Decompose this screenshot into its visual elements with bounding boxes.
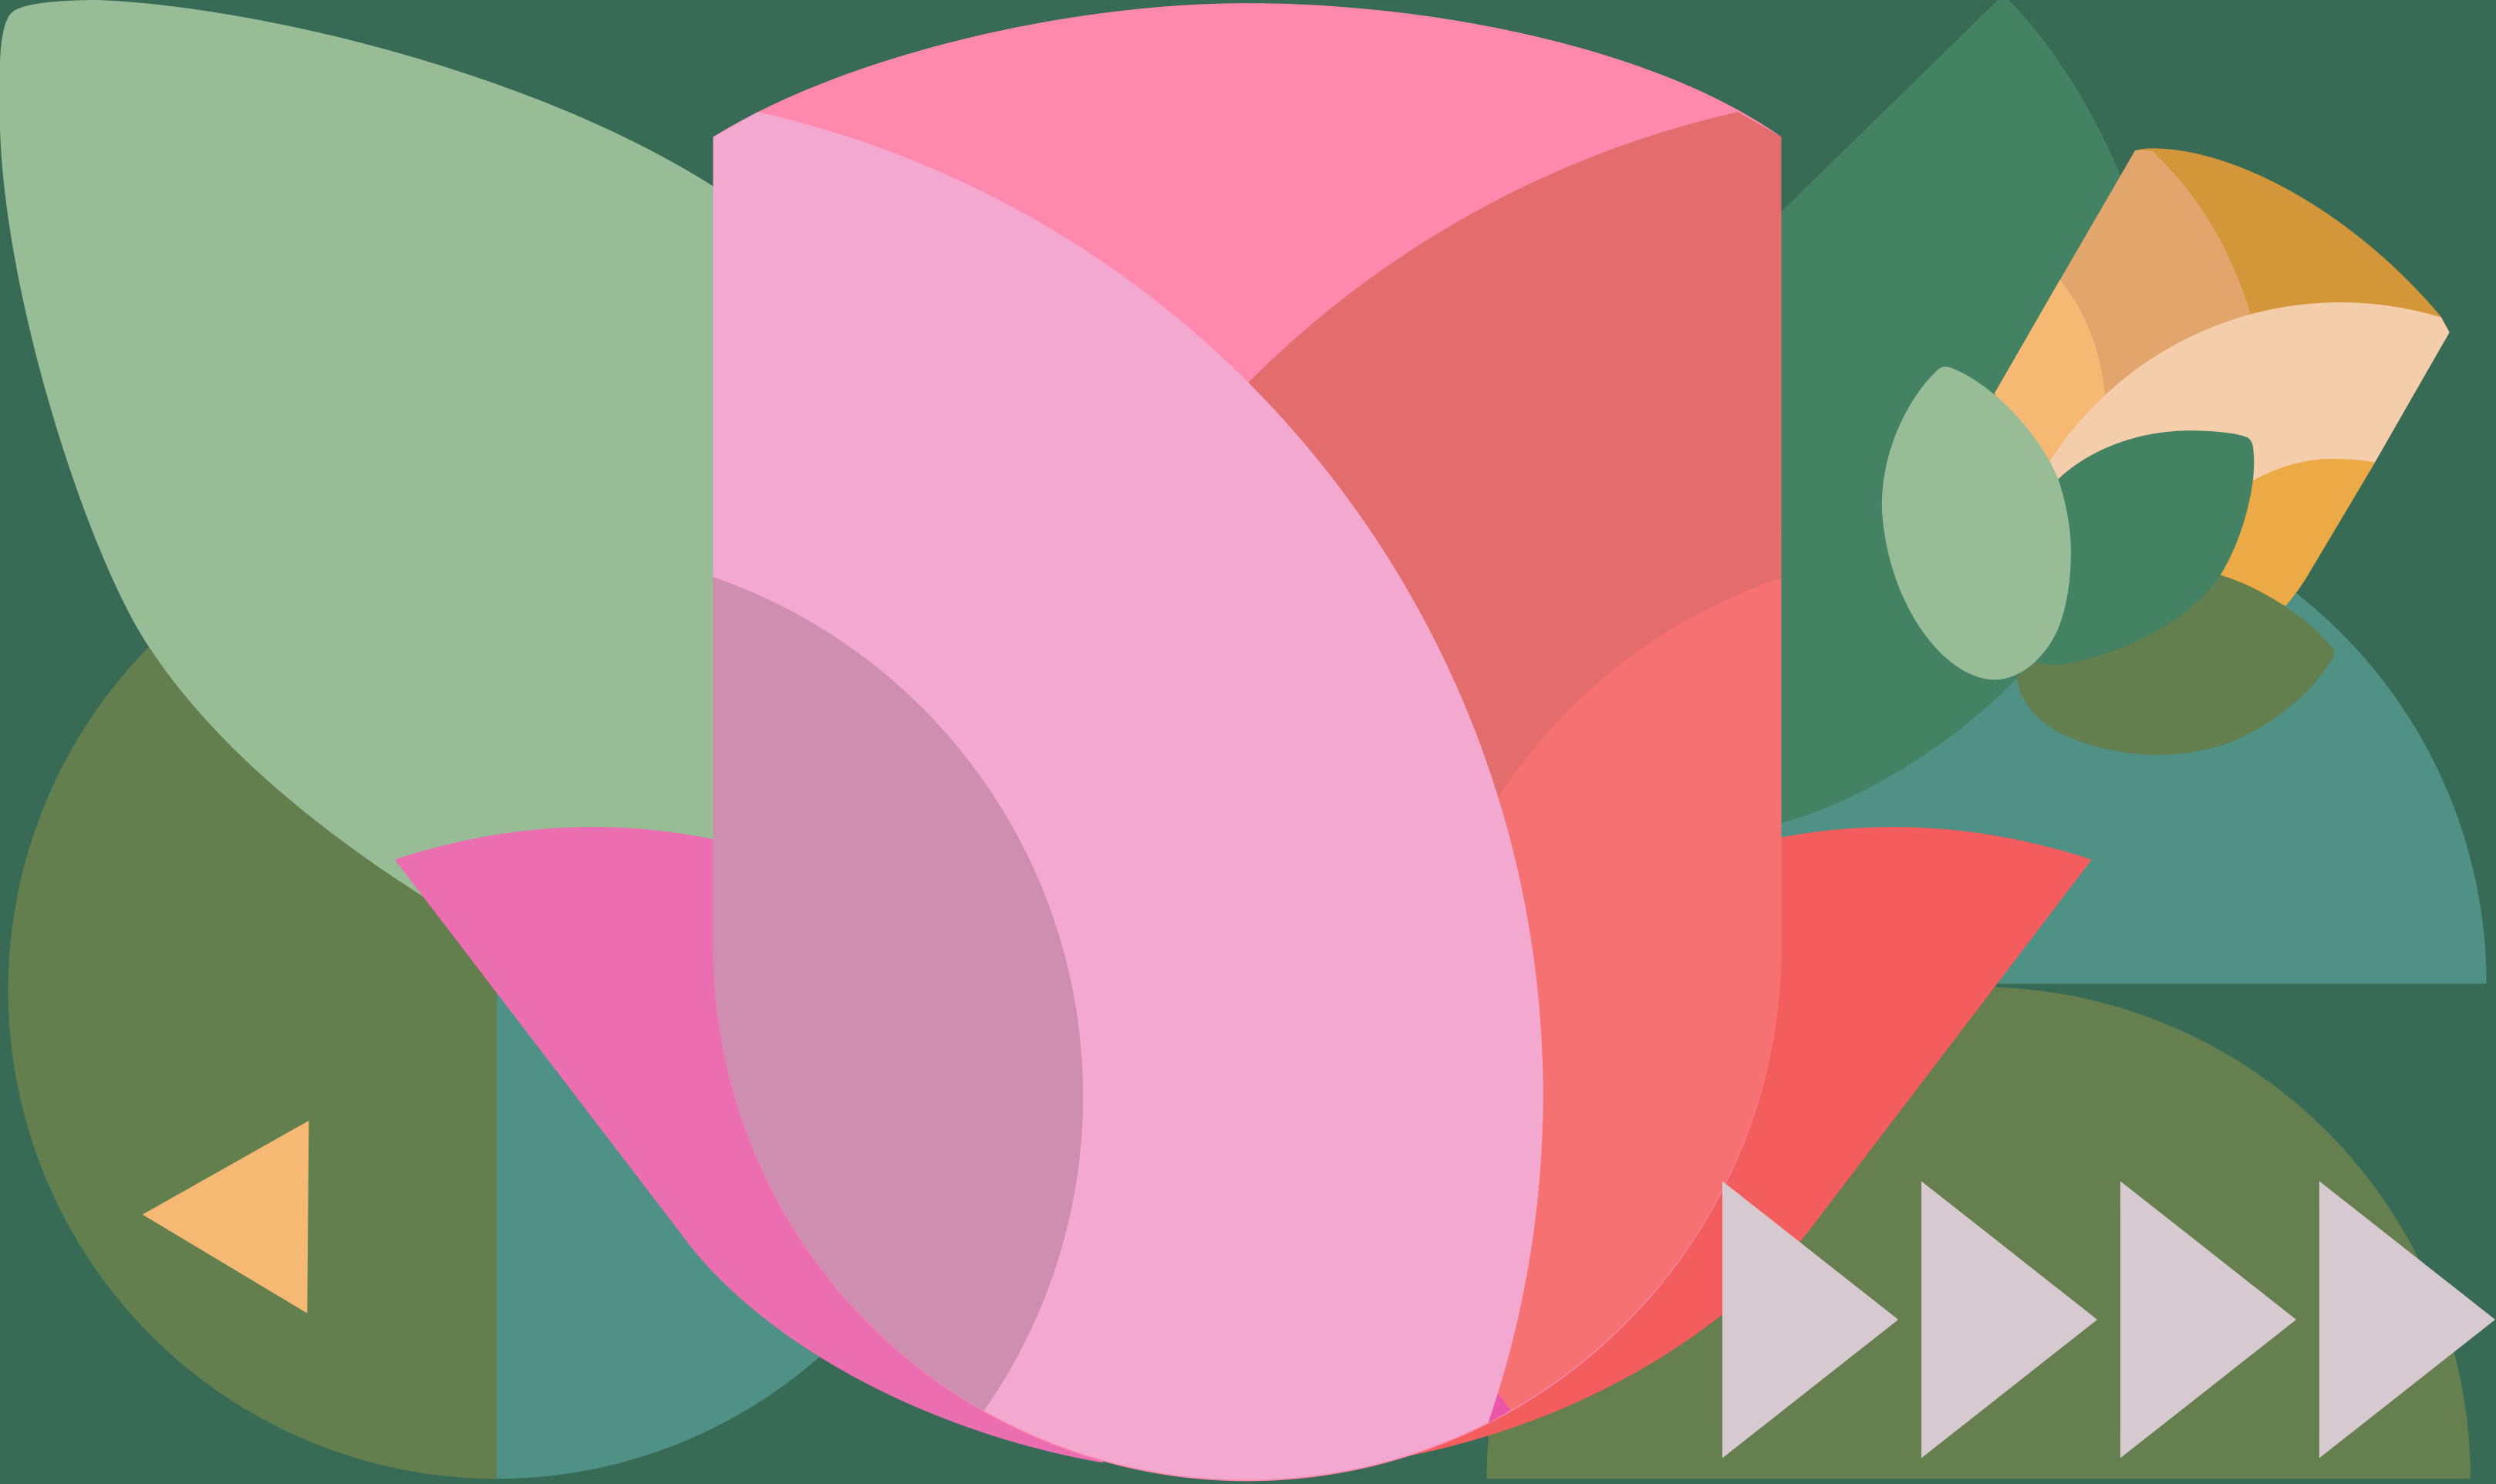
bottom-left circle [8, 501, 985, 1479]
fan petal: orange [2213, 459, 2375, 605]
olive small leaf [2017, 575, 2334, 755]
tulip back petal [713, 3, 1781, 1481]
red right fan petal [1398, 827, 2092, 1458]
pink left fan petal [395, 827, 1103, 1463]
triangle 2 [1921, 1181, 2097, 1458]
tulip body [713, 3, 1781, 1481]
play triangles row [1722, 1181, 2495, 1458]
left large petal [713, 112, 1543, 1480]
triangle 1 [1722, 1181, 1898, 1458]
fan petal: peach [2050, 302, 2450, 509]
right teal semicircle [1493, 487, 2487, 983]
magenta sliver [1489, 1393, 1511, 1423]
orange triangle [143, 1121, 309, 1314]
right inner petal [1410, 578, 1781, 1411]
right large petal [1247, 112, 1781, 955]
left inner petal [713, 577, 1083, 1411]
triangle 4 [2319, 1181, 2495, 1458]
dark green back leaf [1781, 0, 2133, 823]
large light green leaf [0, 0, 713, 898]
fan petal: light orange [1995, 280, 2105, 477]
small light green leaf [1882, 366, 2071, 680]
small dark green leaf [2029, 430, 2254, 665]
fan petal: tan [2060, 150, 2251, 398]
bottom-right olive semicircle [1487, 987, 2471, 1479]
small orange flower fan [1995, 148, 2450, 605]
fan base [1995, 148, 2450, 605]
triangle 3 [2120, 1181, 2296, 1458]
